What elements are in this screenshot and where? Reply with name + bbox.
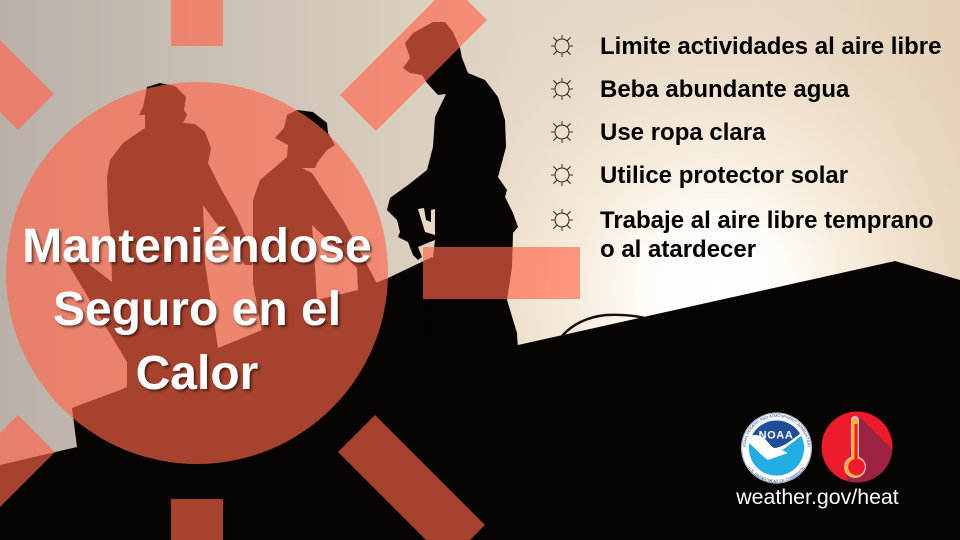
- sun bullet icons: [551, 35, 573, 231]
- sun ray: lower right: [338, 415, 485, 540]
- sun ray: bottom: [171, 499, 223, 540]
- tip 3: Use ropa clara: [600, 119, 765, 146]
- safety tips list: [551, 33, 941, 263]
- title: Calor: [136, 347, 258, 400]
- tip 5: o al atardecer: [600, 236, 756, 263]
- sun ray: top: [171, 0, 223, 46]
- icon: NOAA logo: U.S. DEPARTMENT OF COMMERCE: [748, 466, 804, 482]
- tip 5: Trabaje al aire libre temprano: [600, 207, 933, 234]
- sun ray: right: [423, 247, 580, 299]
- sun ray: lower left: [0, 415, 55, 540]
- tip 5: [600, 207, 933, 263]
- icon: NOAA logo: [741, 412, 812, 484]
- title: [22, 220, 374, 400]
- title: Seguro en el: [53, 283, 341, 336]
- website link text: weather.gov/heat: [736, 485, 899, 509]
- sun disc: [6, 82, 388, 464]
- icon: NOAA logo: NOAA: [759, 430, 793, 442]
- icon: thermometer: [822, 412, 892, 482]
- tip 2: Beba abundante agua: [600, 76, 849, 103]
- sun ray: upper right: [340, 0, 487, 131]
- sun ray: upper left: [0, 0, 54, 130]
- tip 1: Limite actividades al aire libre: [600, 33, 941, 60]
- title: Manteniéndose: [22, 220, 372, 273]
- tip 4: Utilice protector solar: [600, 162, 848, 189]
- logos and website: [736, 412, 899, 509]
